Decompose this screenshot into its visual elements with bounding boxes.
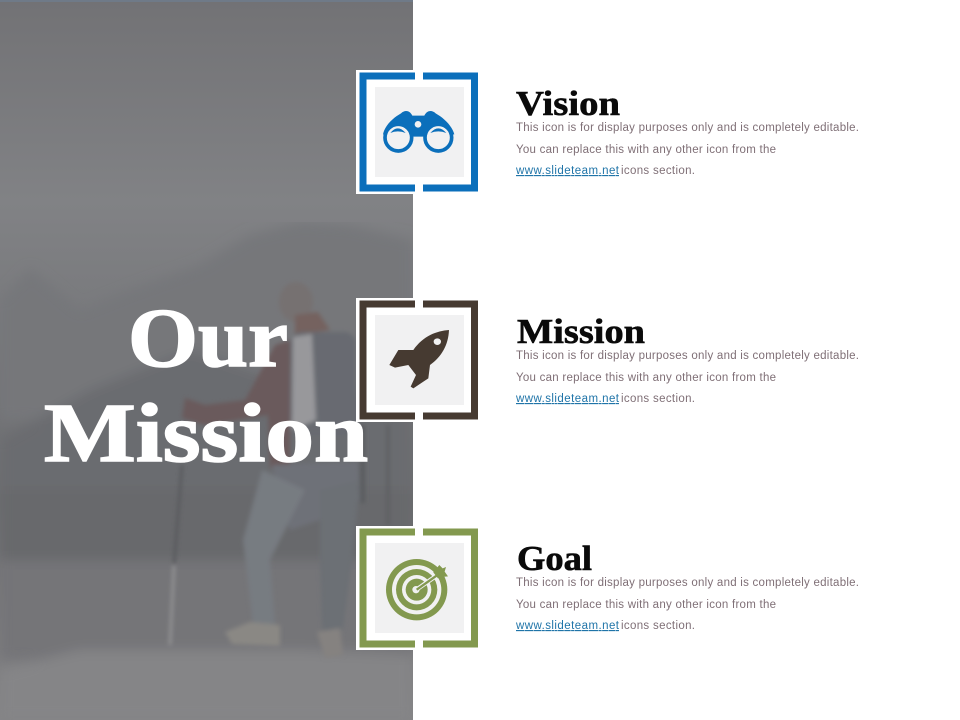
icon: target with arrow — [386, 559, 448, 620]
text block: vision: www.slideteam.net — [515, 165, 620, 177]
text block: goal — [515, 577, 859, 632]
panel: goal — [356, 526, 859, 650]
heading: mission: Mission — [517, 312, 645, 351]
text block: vision: You can replace this with any other icon from the — [516, 144, 776, 156]
icon: rocket — [389, 330, 449, 388]
text block: mission: icons section. — [621, 393, 695, 405]
panel: mission — [356, 298, 859, 422]
panel: hiker photo background — [0, 0, 413, 720]
title: Our Mission: Our — [128, 292, 288, 385]
text block: vision — [515, 122, 859, 177]
title: Our Mission: Mission — [44, 387, 368, 480]
text block: vision: This icon is for display purposes only and is completely editable. — [516, 122, 859, 134]
icon frame: mission — [356, 298, 474, 422]
text block: goal: This icon is for display purposes only and is completely editable. — [516, 577, 859, 589]
icon frame: vision — [356, 70, 474, 194]
text block: goal: icons section. — [621, 620, 695, 632]
text block: mission: This icon is for display purposes only and is completely editable. — [516, 350, 859, 362]
heading: goal: Goal — [517, 539, 592, 578]
title: Our Mission — [44, 292, 368, 480]
panel: vision — [356, 70, 859, 194]
text block: mission — [515, 350, 859, 405]
text block: mission: You can replace this with any other icon from the — [516, 372, 776, 384]
hiker figure — [168, 285, 365, 652]
text block: vision: icons section. — [621, 165, 695, 177]
text block: goal: You can replace this with any other icon from the — [516, 599, 776, 611]
icon frame: goal — [356, 526, 474, 650]
text block: mission: www.slideteam.net — [515, 393, 620, 405]
heading: vision: Vision — [516, 84, 620, 123]
text block: goal: www.slideteam.net — [515, 620, 620, 632]
icon: binoculars — [383, 111, 454, 151]
